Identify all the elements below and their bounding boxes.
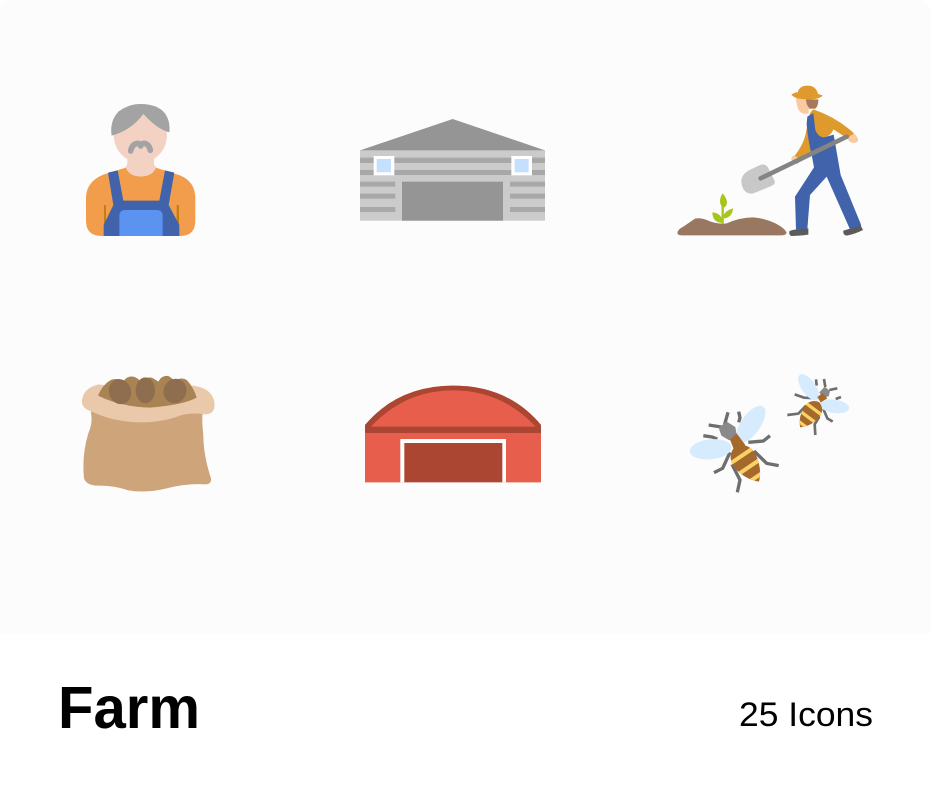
title: Farm <box>58 675 200 741</box>
icon: two bees <box>689 371 850 492</box>
icon: small bee <box>787 371 850 435</box>
icon: grey barn <box>360 119 545 221</box>
icon: old farmer portrait <box>86 104 195 236</box>
icon: sack of beans <box>82 375 215 491</box>
icon: farmer digging with shovel <box>677 86 863 236</box>
icon: red barn <box>365 386 541 482</box>
infographic canvas <box>62 86 872 728</box>
icon count: 25 Icons <box>739 696 873 734</box>
icon: large bee <box>689 401 779 492</box>
